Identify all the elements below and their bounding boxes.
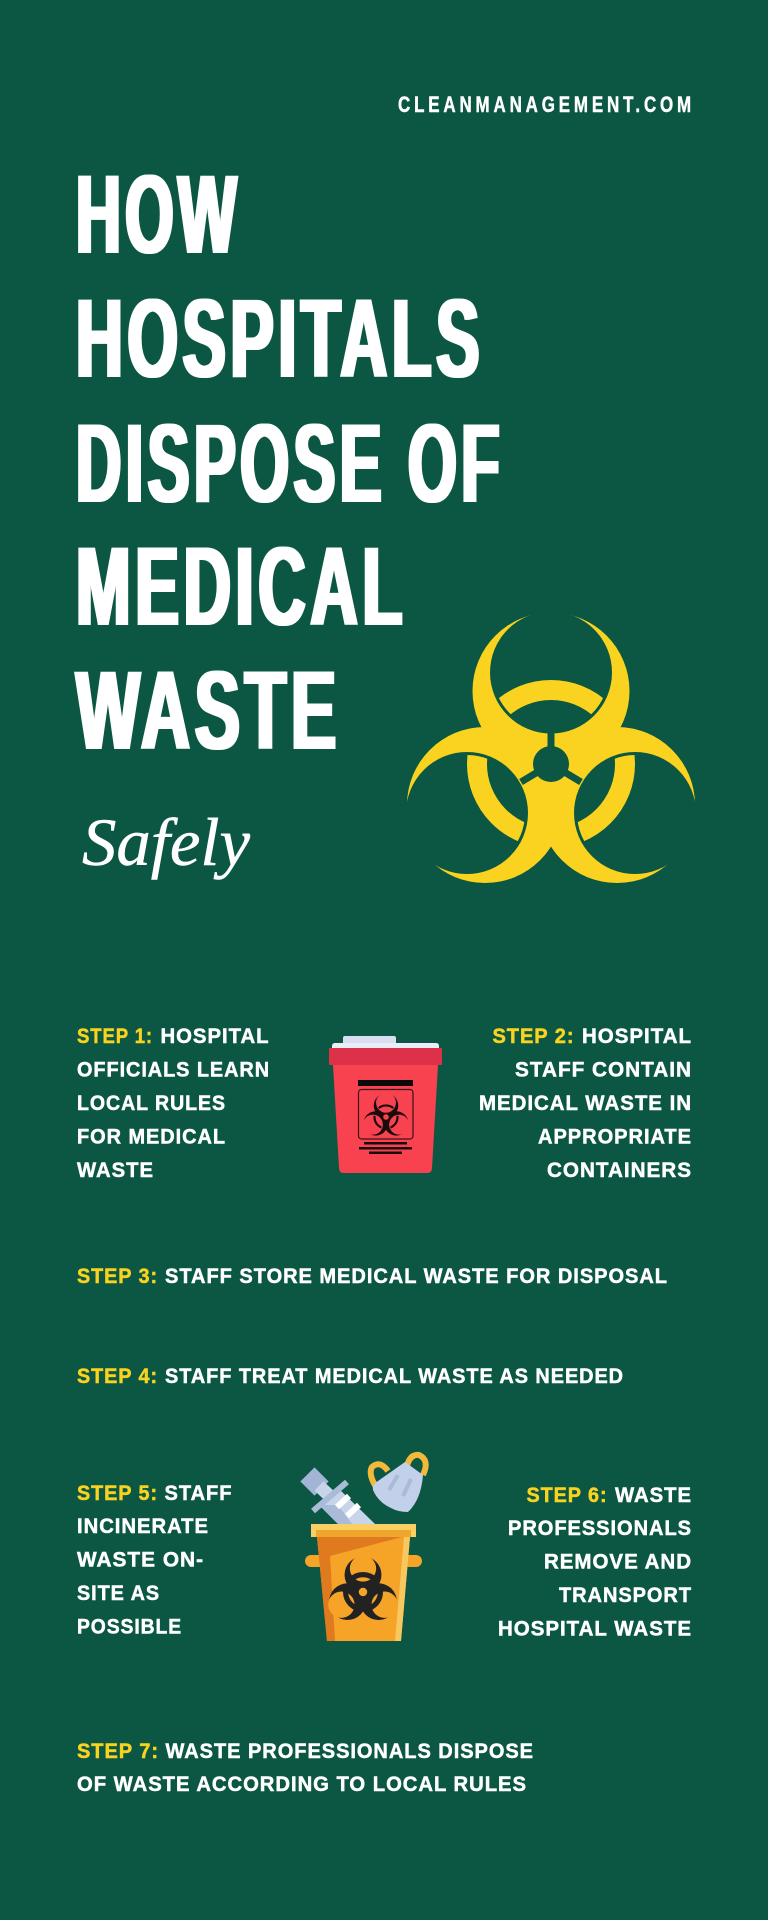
title: WASTE bbox=[76, 648, 341, 773]
icon: syringe bbox=[300, 1467, 375, 1524]
title: HOW bbox=[76, 152, 241, 277]
step 5 text: STAFF bbox=[164, 1482, 232, 1505]
step 4 label: STEP 4: bbox=[77, 1365, 158, 1388]
step 1 text: WASTE bbox=[77, 1159, 154, 1182]
step 2 text: HOSPITAL bbox=[582, 1025, 692, 1048]
step 5 text: INCINERATE bbox=[77, 1515, 209, 1538]
step 5 text: POSSIBLE bbox=[77, 1616, 182, 1638]
step 2 text bbox=[479, 1025, 692, 1182]
title: HOSPITALS bbox=[76, 276, 484, 401]
step 1 text bbox=[77, 1025, 270, 1182]
icon: biohazard mark on bin bbox=[328, 1555, 398, 1620]
step 3 text: STAFF STORE MEDICAL WASTE FOR DISPOSAL bbox=[165, 1265, 668, 1288]
step 2 text: APPROPRIATE bbox=[538, 1126, 692, 1148]
icon: red sharps container bbox=[329, 1036, 442, 1173]
step 7 text: WASTE PROFESSIONALS DISPOSE bbox=[166, 1740, 534, 1763]
step 4 text: STAFF TREAT MEDICAL WASTE AS NEEDED bbox=[165, 1365, 624, 1388]
bin body bbox=[317, 1537, 410, 1641]
step 7 text bbox=[77, 1740, 534, 1796]
step 3 label: STEP 3: bbox=[77, 1265, 158, 1288]
icon: face mask bbox=[371, 1455, 426, 1512]
step 1 label: STEP 1: bbox=[77, 1025, 153, 1048]
step 7 label: STEP 7: bbox=[77, 1740, 159, 1763]
step 7 text: OF WASTE ACCORDING TO LOCAL RULES bbox=[77, 1773, 527, 1796]
step 1 text: HOSPITAL bbox=[160, 1025, 270, 1048]
title bbox=[76, 152, 504, 773]
step 6 text: TRANSPORT bbox=[559, 1584, 692, 1607]
step 1 text: OFFICIALS LEARN bbox=[77, 1058, 270, 1082]
step 5 label: STEP 5: bbox=[77, 1482, 158, 1505]
step 6 text: PROFESSIONALS bbox=[508, 1517, 692, 1540]
bin handles bbox=[305, 1555, 325, 1567]
step 5 text: WASTE ON- bbox=[77, 1548, 204, 1572]
step 6 label: STEP 6: bbox=[526, 1484, 608, 1507]
step 2 text: STAFF CONTAIN bbox=[515, 1058, 692, 1082]
step 5 text bbox=[77, 1482, 232, 1638]
step 6 text: REMOVE AND bbox=[544, 1550, 692, 1574]
step 6 text: HOSPITAL WASTE bbox=[498, 1618, 692, 1640]
step 2 text: MEDICAL WASTE IN bbox=[479, 1092, 692, 1115]
step 1 text: LOCAL RULES bbox=[77, 1092, 226, 1115]
step 6 text: WASTE bbox=[615, 1484, 692, 1507]
icon: small biohazard mark bbox=[363, 1093, 409, 1136]
icon: orange waste bin with syringe and mask bbox=[300, 1455, 426, 1641]
step 1 text: FOR MEDICAL bbox=[77, 1126, 226, 1148]
step 2 text: CONTAINERS bbox=[547, 1159, 692, 1182]
step 5 text: SITE AS bbox=[77, 1582, 160, 1605]
step 2 label: STEP 2: bbox=[492, 1025, 574, 1048]
step 6 text bbox=[498, 1484, 692, 1640]
bin rim bbox=[311, 1524, 416, 1537]
title: MEDICAL bbox=[76, 524, 407, 649]
icon: large biohazard symbol bbox=[406, 612, 696, 883]
subtitle: Safely: Safely bbox=[82, 804, 251, 880]
